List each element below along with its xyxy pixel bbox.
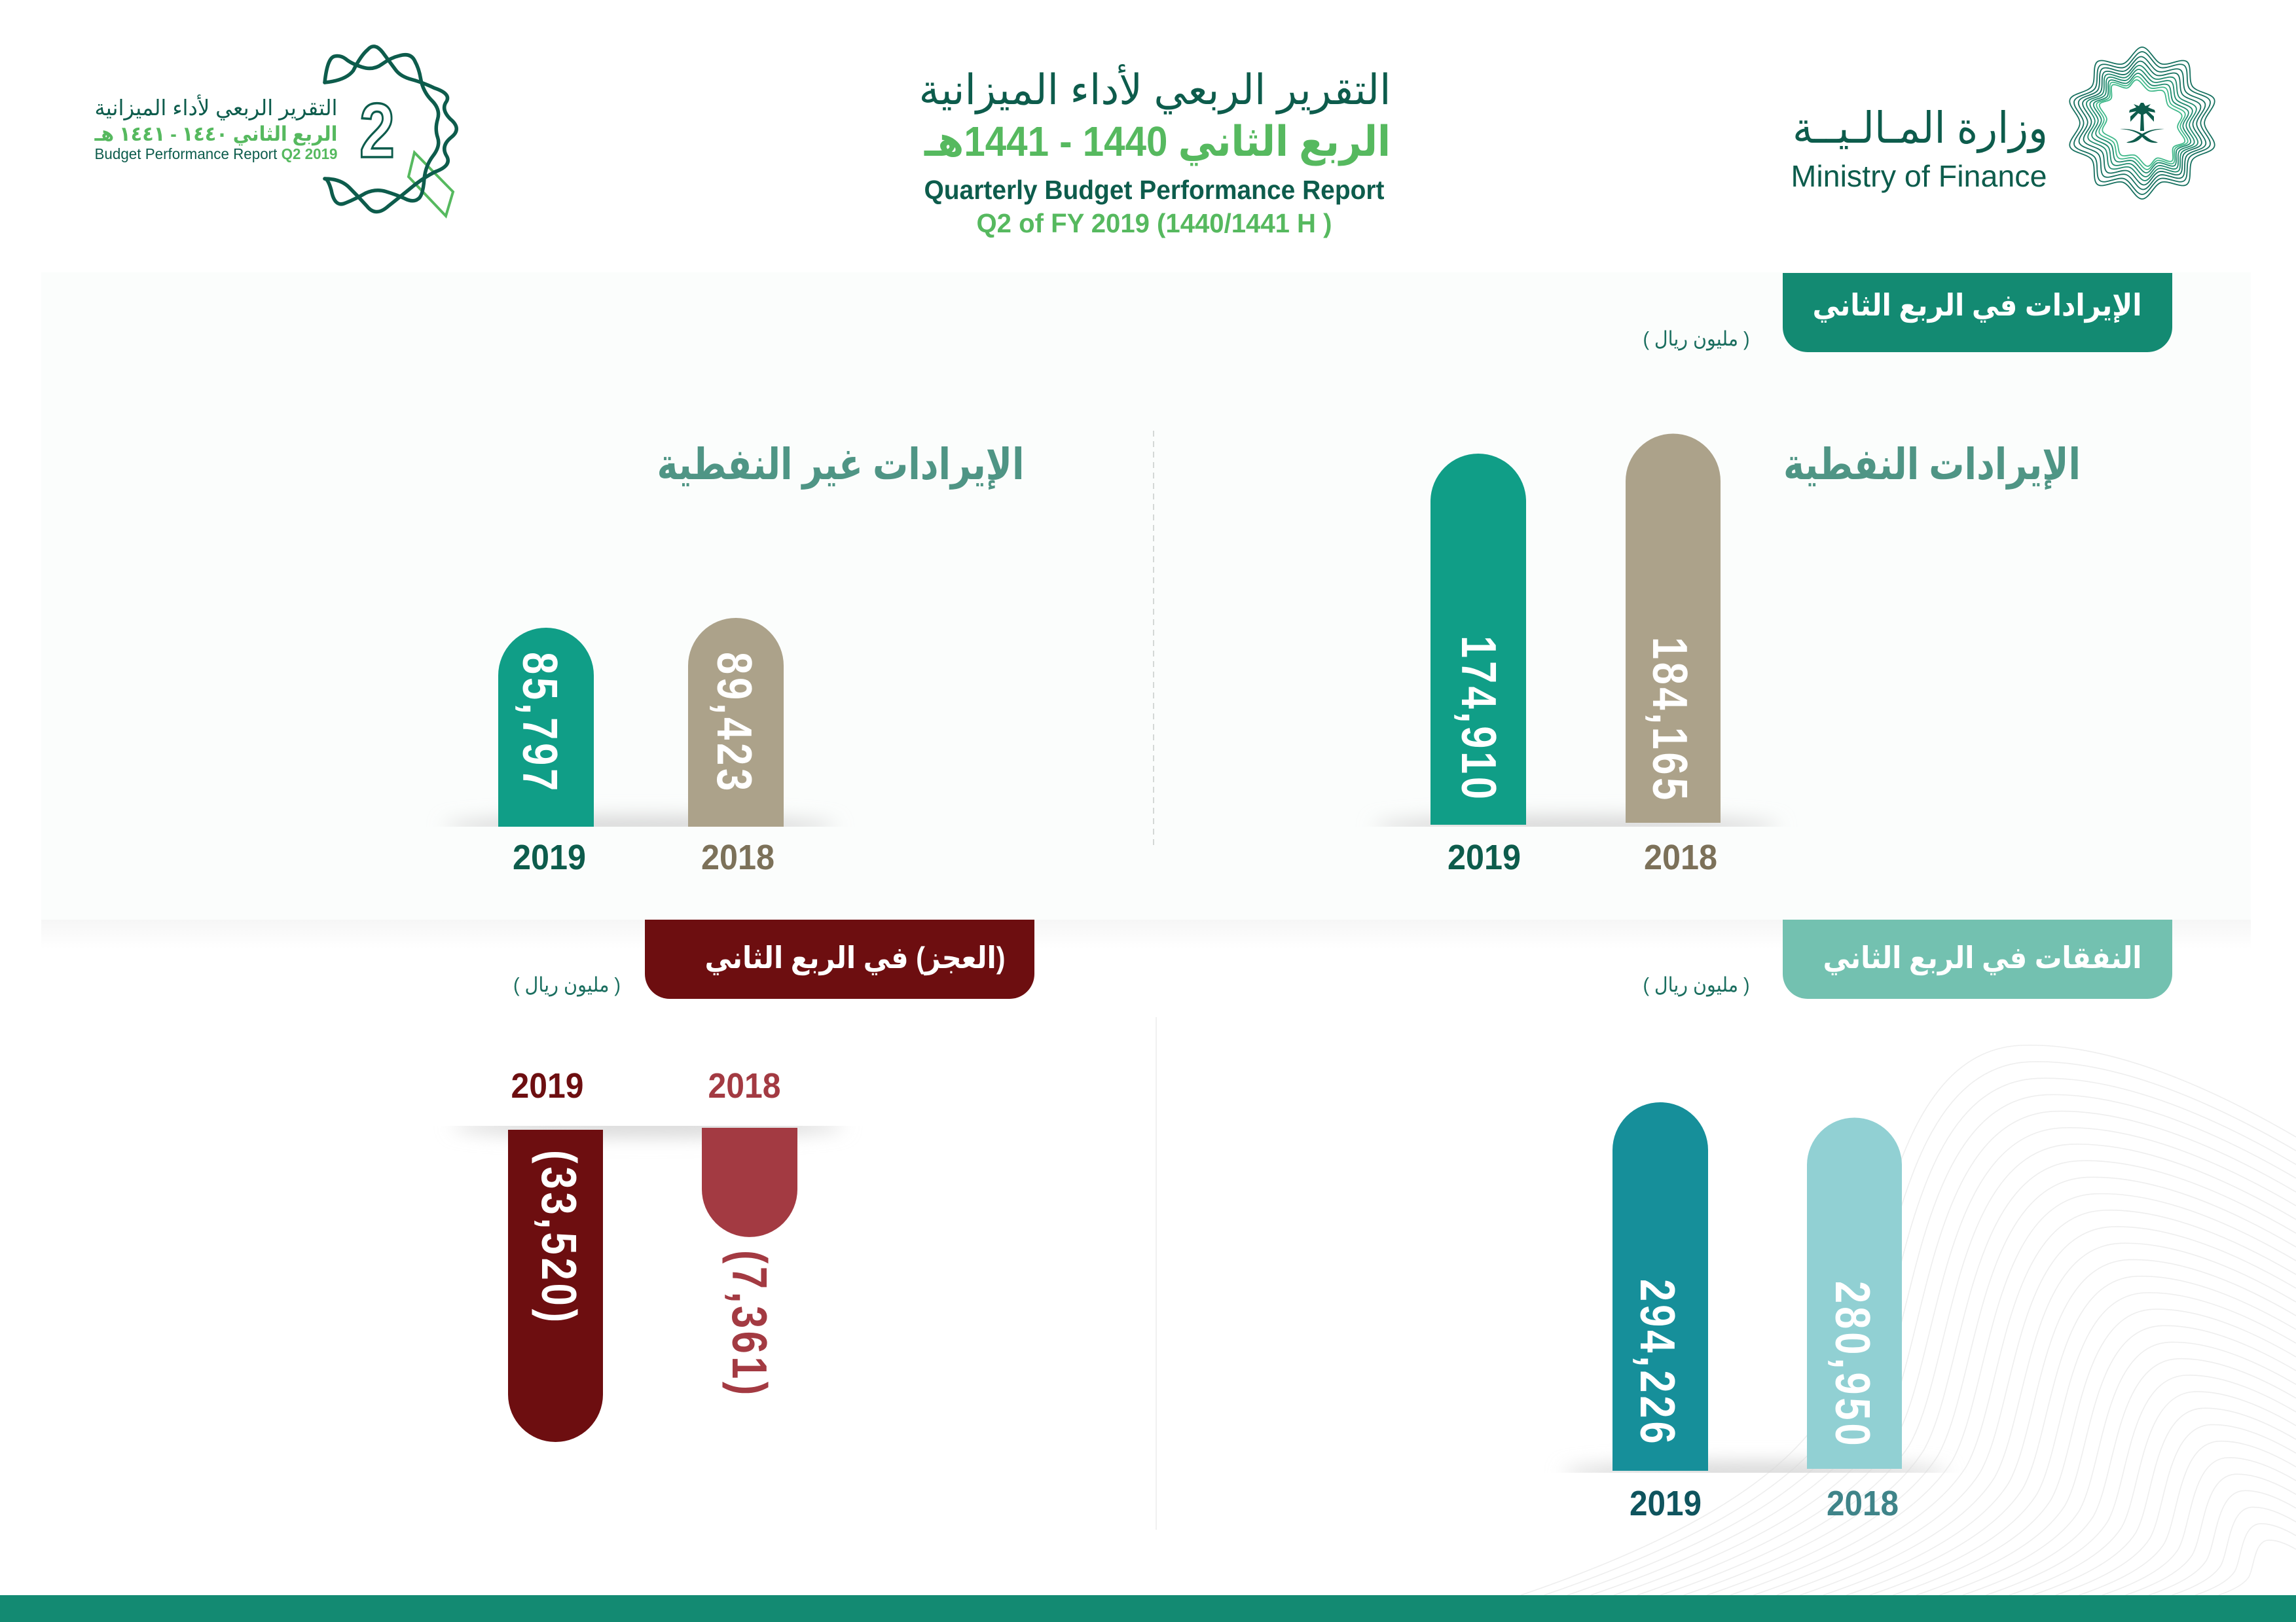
bar: oil 2019 [1430, 454, 1526, 825]
footer band [0, 1595, 2296, 1622]
bar: non-oil 2019 [498, 628, 594, 827]
bar: non-oil 2018: 89,423 [707, 652, 762, 791]
bar: deficit 2019: (33,520) [532, 1150, 587, 1322]
panel: deficit chart [452, 1066, 845, 1442]
panel: revenues background [41, 272, 2251, 920]
year label 2019: 2019 [511, 1066, 584, 1106]
title arabic: التقرير الربعي لأداء الميزانية [919, 63, 1391, 115]
year label 2019: 2019 [1448, 838, 1521, 877]
value: deficit 2018: (7,361) [722, 1250, 777, 1395]
icon: palm and swords [2120, 103, 2164, 143]
year label 2018: 2018 [701, 838, 774, 877]
bar: expenditures 2019 [1613, 1102, 1708, 1471]
divider: lower section [1156, 1017, 1157, 1530]
bar: deficit 2019 [508, 1130, 603, 1442]
panel bottom shadow [41, 920, 2251, 949]
bar: expenditures 2019: 294,226 [1630, 1279, 1685, 1444]
year label 2019: 2019 [1630, 1484, 1702, 1523]
bar: oil 2018: 184,165 [1643, 637, 1698, 800]
panel: expenditures chart [1562, 1102, 1948, 1523]
logo: Ministry of Finance [1791, 47, 2215, 199]
tab: revenues in Q2 [1783, 273, 2172, 352]
icon: twisted ring strands [325, 46, 456, 211]
tab label: (العجز) في الربع الثاني [704, 941, 1006, 975]
bar: expenditures 2018: 280,950 [1825, 1281, 1880, 1446]
bar: non-oil 2018 [688, 618, 784, 827]
title block [919, 63, 1391, 238]
badge text arabic title: التقرير الربعي لأداء الميزانية [94, 94, 338, 120]
badge text english: Budget Performance Report Q2 2019 [94, 145, 338, 162]
numeral 2: 2 [359, 88, 395, 174]
bar: non-oil 2019: 85,797 [513, 652, 568, 791]
tab: deficit in Q2 [645, 920, 1034, 999]
ministry name arabic: وزارة المـالـيــة [1793, 103, 2048, 153]
heading: oil revenues: الإيرادات النفطية [1783, 440, 2081, 490]
tab label: النفقات في الربع الثاني [1823, 941, 2142, 975]
bar shadow [452, 809, 829, 827]
logo: quarter report badge [94, 46, 456, 216]
year label 2018: 2018 [708, 1066, 780, 1106]
bar: expenditures 2018 [1807, 1118, 1902, 1469]
subtitle english period: Q2 of FY 2019 (1440/1441 H ) [977, 208, 1332, 238]
panel: oil revenues chart [1374, 433, 2081, 877]
unit label expenditures: ( مليون ريال ) [1643, 973, 1749, 997]
bar shadow [1381, 809, 1772, 827]
tab: expenditures in Q2 [1783, 920, 2172, 999]
bar: oil 2018 [1626, 433, 1721, 823]
subtitle arabic period: الربع الثاني 1440 - 1441هـ [924, 118, 1391, 166]
year label 2019: 2019 [513, 838, 586, 877]
unit label revenues: ( مليون ريال ) [1643, 327, 1749, 351]
title english: Quarterly Budget Performance Report [924, 175, 1385, 205]
tab label: الإيرادات في الربع الثاني [1812, 288, 2142, 323]
bar: deficit 2018 [702, 1128, 797, 1237]
year label 2018: 2018 [1827, 1484, 1899, 1523]
year label 2018: 2018 [1644, 838, 1717, 877]
unit label deficit: ( مليون ريال ) [513, 973, 621, 997]
divider: revenue panel [1153, 431, 1154, 848]
heading: non-oil revenues: الإيرادات غير النفطية [657, 440, 1024, 490]
icon: green diamond outline [409, 153, 453, 216]
bar: oil 2019: 174,910 [1451, 636, 1506, 799]
panel: non-oil revenues chart [444, 440, 1024, 877]
icon: emblem rings [2069, 47, 2215, 199]
ministry name english: Ministry of Finance [1791, 159, 2047, 193]
badge text arabic period: الربع الثاني ١٤٤٠ - ١٤٤١ هـ [94, 122, 338, 146]
bar shadow [458, 1126, 838, 1144]
background wave pattern [1521, 1045, 2296, 1595]
bar shadow [1569, 1454, 1942, 1473]
